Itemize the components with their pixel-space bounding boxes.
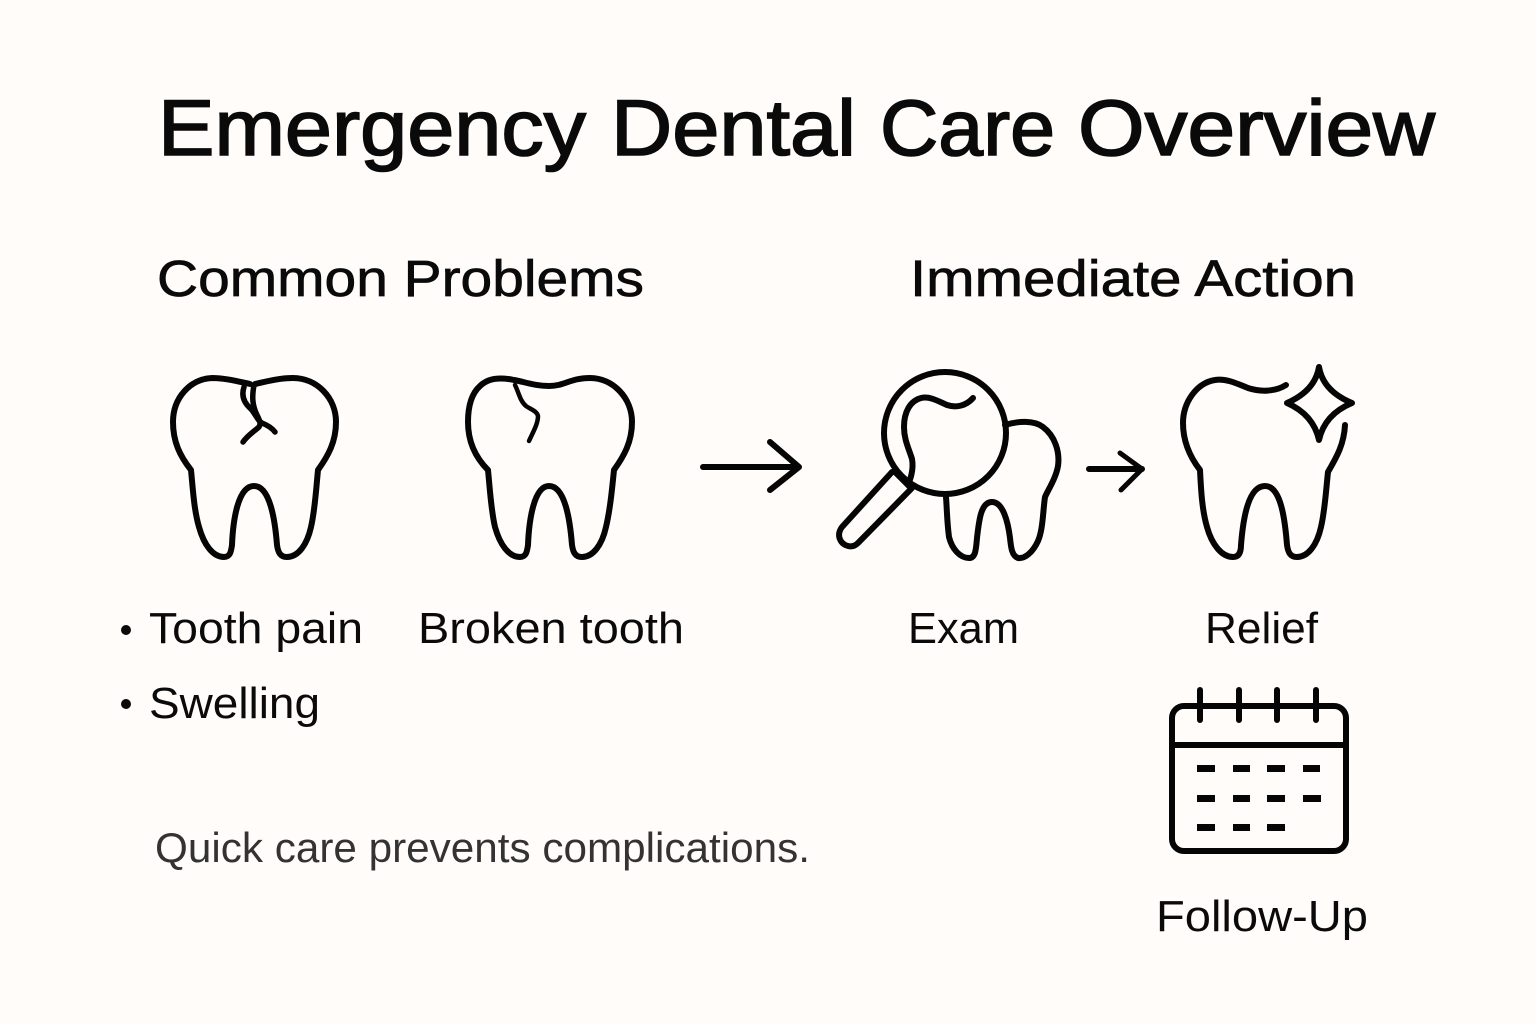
heading: immediate action: Immediate Action — [910, 250, 1356, 307]
note: quick care: Quick care prevents complications. — [155, 824, 810, 871]
label: tooth pain: Tooth pain — [149, 604, 363, 653]
icon: calendar follow-up — [1172, 690, 1346, 851]
bullet: swelling — [121, 699, 131, 709]
label: follow-up: Follow-Up — [1156, 892, 1368, 941]
title: Care — [880, 83, 1055, 172]
title: Emergency — [158, 83, 587, 172]
icon: relief tooth with sparkle — [1183, 367, 1352, 557]
icon: cracked tooth — [173, 378, 336, 557]
icon: exam magnifier and tooth — [839, 372, 1058, 558]
title: Overview — [1078, 83, 1436, 172]
title — [158, 83, 1436, 172]
icon: broken tooth — [468, 378, 632, 557]
label: swelling: Swelling — [149, 679, 320, 728]
label: exam: Exam — [908, 604, 1019, 653]
title: Dental — [611, 83, 856, 172]
arrow: exam to relief — [1089, 453, 1142, 490]
label: broken tooth: Broken tooth — [418, 604, 684, 653]
arrow: problems to action — [703, 442, 799, 490]
label: relief: Relief — [1205, 604, 1319, 653]
heading: common problems: Common Problems — [157, 250, 644, 307]
bullet: tooth pain — [121, 625, 131, 635]
